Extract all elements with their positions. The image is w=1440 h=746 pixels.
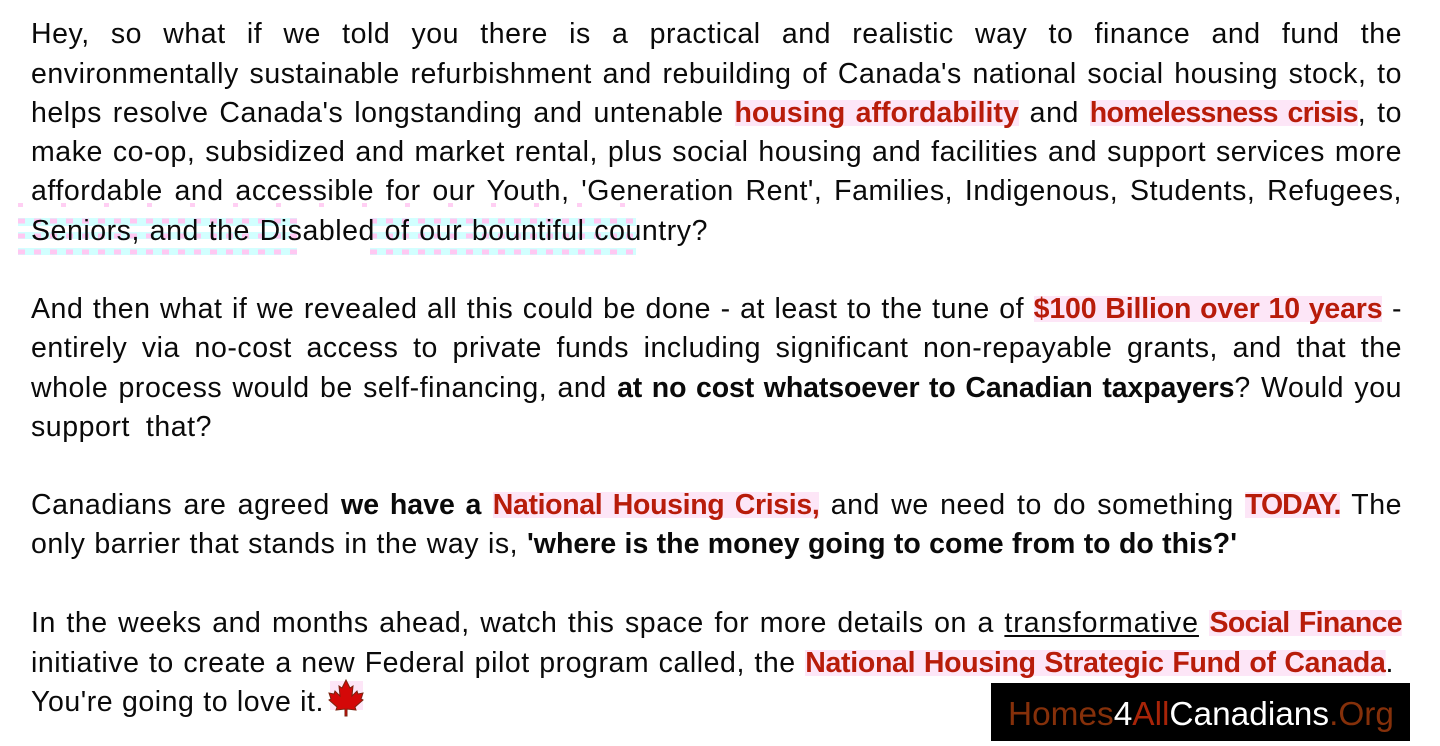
paragraph 4: social finance initiative: In the weeks and months ahead, watch this space for more details on a transformative Social Finance: [31, 607, 1402, 639]
paragraph 2: $100 billion over 10 years: support that?: [31, 411, 212, 443]
paragraph 1: the housing finance question: make co-op, subsidized and market rental, plus social housing and facilities and support services more: [31, 136, 1402, 168]
paragraph 3: national housing crisis: [31, 489, 1402, 560]
paragraph 1: the housing finance question: affordable and accessible for our Youth, 'Generation Rent', Families, Indigenous, Students, Refugees,: [31, 175, 1402, 207]
paragraph 3: national housing crisis: only barrier that stands in the way is, 'where is the money going to come from to do this?': [31, 528, 1237, 560]
paragraph 3: national housing crisis: Canadians are agreed we have a National Housing Crisis, and we need to do something TODAY. The: [31, 489, 1402, 521]
paragraph 1: the housing finance question: Hey, so what if we told you there is a practical and realistic way to finance and fund the: [31, 18, 1402, 50]
paragraph 2: $100 billion over 10 years: And then what if we revealed all this could be done - at least to the tune of $100 Billion over 10 years -: [31, 293, 1402, 325]
paragraph 2: $100 billion over 10 years: whole process would be self-financing, and at no cost whatsoever to Canadian taxpayers? Would you: [31, 372, 1402, 404]
paragraph 1: the housing finance question: [31, 18, 1402, 247]
paragraph 4: social finance initiative: [31, 607, 1402, 718]
paragraph 2: $100 billion over 10 years: entirely via no-cost access to private funds including significant non-repayable grants, and that the: [31, 332, 1402, 364]
icon: maple leaf: [328, 679, 364, 716]
paragraph 4: social finance initiative: You're going to love it.: [31, 686, 324, 718]
logo: Homes4AllCanadians.Org: [991, 683, 1410, 741]
paragraph 1: the housing finance question: helps resolve Canada's longstanding and untenable housing affordability and homelessness crisis, to: [31, 97, 1402, 129]
paragraph 4: social finance initiative: initiative to create a new Federal pilot program called, the National Housing Strategic Fund of Canada.: [31, 647, 1394, 679]
paragraph 1: the housing finance question: environmentally sustainable refurbishment and rebuilding of Canada's national social housing stock, to: [31, 58, 1402, 90]
logo: Homes4AllCanadians.Org: Homes4AllCanadians.Org: [1008, 695, 1394, 732]
paragraph 1: the housing finance question: Seniors, and the Disabled of our bountiful country?: [31, 215, 708, 247]
paragraph 2: $100 billion over 10 years: [31, 293, 1402, 443]
decorative print artefact behind line six: [18, 203, 636, 255]
